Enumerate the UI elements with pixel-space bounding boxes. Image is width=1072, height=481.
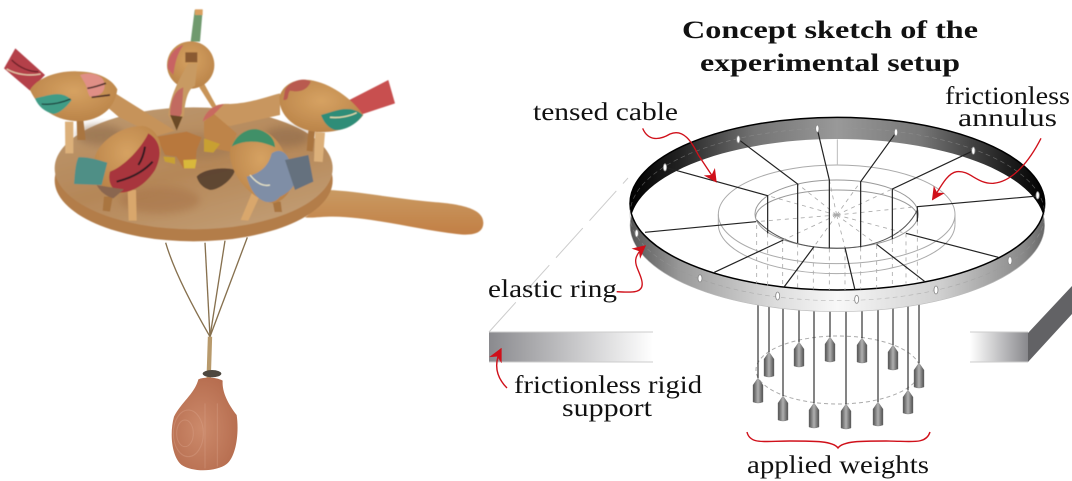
elastic ring and annulus assembly [617, 117, 1045, 312]
label: frictionless annulus: frictionless [945, 83, 1070, 110]
arrow: frictionless annulus [933, 138, 1041, 199]
tensed cables [645, 129, 1038, 290]
photo: wooden pecking birds toy [4, 9, 483, 241]
arrow: elastic ring [617, 246, 645, 292]
bird: left [4, 48, 202, 168]
title: Concept sketch of the [682, 17, 978, 44]
title [682, 17, 978, 77]
ring inner wall [630, 117, 1045, 290]
brace: applied weights [747, 432, 930, 448]
wires [758, 300, 919, 404]
photo: strings and wooden pot weight [166, 237, 247, 470]
ring top edge [630, 117, 1045, 290]
bird: back [167, 9, 217, 131]
bird: right [203, 80, 395, 162]
label: applied weights: applied weights [747, 452, 929, 479]
stone [203, 370, 221, 377]
ring eyelets [635, 125, 1039, 303]
ring dashed centreline [630, 128, 1045, 301]
label: tensed cable: tensed cable [533, 99, 678, 126]
cords [166, 237, 247, 337]
guide circle [756, 336, 920, 404]
label: frictionless rigid support: support [562, 395, 652, 422]
title: experimental setup [700, 50, 960, 77]
label: frictionless rigid support: frictionless rigid [514, 372, 703, 399]
weights [753, 337, 924, 429]
label: frictionless annulus: annulus [958, 105, 1057, 132]
frictionless annulus [718, 139, 955, 274]
pot [172, 378, 238, 470]
knot [209, 337, 210, 378]
ring interior [632, 139, 1042, 290]
right rigid support [970, 286, 1072, 362]
round wooden platform [55, 107, 333, 241]
toy handle [305, 190, 483, 235]
label: frictionless rigid support [514, 372, 703, 422]
applied weights with wires [753, 300, 924, 429]
bird: front right [230, 129, 313, 221]
arrow: tensed cable [643, 128, 716, 182]
radial dashes [756, 180, 917, 290]
arrow: frictionless rigid support [497, 349, 507, 388]
ring outer wall [630, 139, 1045, 312]
left rigid support [489, 178, 653, 362]
label: elastic ring: elastic ring [488, 276, 618, 303]
label: frictionless annulus [945, 83, 1070, 132]
bird: front left [74, 126, 161, 221]
